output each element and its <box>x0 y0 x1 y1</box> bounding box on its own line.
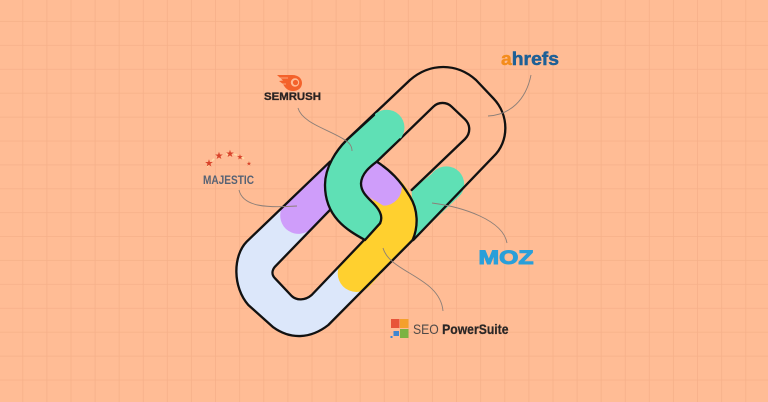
logo: SEO PowerSuite <box>390 319 509 338</box>
icon: arc of stars: ★ <box>205 158 214 170</box>
icon: arc of stars: ★ <box>226 149 235 160</box>
wordmark: SEMRUSH: SEMRUSH <box>264 91 321 103</box>
icon: arc of stars: ★ <box>215 151 224 162</box>
connector: Ahrefs <box>488 75 531 116</box>
icon: Semrush flame <box>277 75 302 91</box>
logo: Semrush <box>264 75 321 103</box>
purple band of lower link, centre <box>358 162 402 206</box>
connector: SEO PowerSuite <box>383 248 443 311</box>
lower link outline <box>236 162 417 336</box>
wordmark: MAJESTIC: MAJESTIC <box>203 173 254 187</box>
yellow band of lower link <box>338 162 417 292</box>
icon: arc of stars <box>205 149 252 170</box>
icon: SEO PowerSuite squares <box>390 319 408 338</box>
green band outline <box>325 115 400 240</box>
chain link illustration <box>236 67 505 336</box>
icon: arc of stars: ★ <box>237 152 244 162</box>
connector: Majestic <box>239 190 297 207</box>
connector: Semrush <box>298 108 352 151</box>
wordmark: SEO PowerSuite: SEO PowerSuite <box>413 321 509 337</box>
logo: Majestic <box>203 149 254 187</box>
upper link outline <box>347 67 505 240</box>
lower link light blue body <box>236 162 413 336</box>
purple band of lower link, left <box>280 162 330 234</box>
connector: Moz <box>432 203 507 243</box>
green S band of upper link <box>325 110 404 240</box>
green band of upper link, right side <box>412 166 464 240</box>
icon: arc of stars: ★ <box>246 160 252 168</box>
logo: Ahrefs: ahrefs <box>501 48 559 69</box>
logo: Moz: MOZ <box>478 247 534 269</box>
